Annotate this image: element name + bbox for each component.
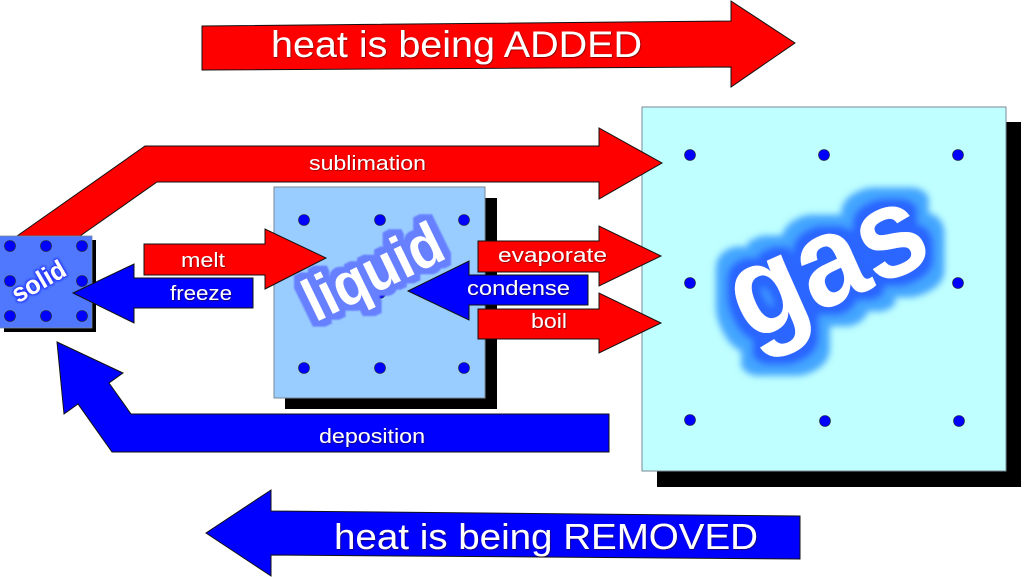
- arrow: sublimation: sublimation: [309, 153, 426, 175]
- arrow: evaporate: [478, 226, 661, 286]
- arrow: boil: [478, 293, 661, 353]
- arrow: condense: condense: [467, 278, 570, 300]
- arrow: deposition: deposition: [319, 426, 425, 448]
- panel: solid box: solid: [6, 254, 71, 309]
- panel: solid box: [0, 236, 96, 332]
- arrow: heat is being added: heat is being ADDED: [271, 24, 642, 65]
- arrow: heat is being removed: [206, 490, 800, 576]
- arrow: boil: boil: [531, 311, 567, 333]
- arrow: melt: [144, 229, 326, 289]
- arrow: melt: melt: [181, 250, 226, 272]
- arrow: freeze: freeze: [170, 283, 232, 305]
- arrow: heat is being added: [202, 1, 795, 87]
- arrow: heat is being removed: heat is being REMOVED: [334, 516, 758, 557]
- panel: liquid box: [274, 187, 497, 409]
- panel: gas box: [642, 107, 1021, 487]
- arrow: deposition: [57, 342, 609, 452]
- arrow: sublimation: [17, 128, 662, 236]
- panel: gas box: gas: [703, 155, 947, 368]
- arrow: condense: [408, 261, 588, 320]
- arrow: evaporate: evaporate: [498, 245, 607, 267]
- arrow: freeze: [73, 264, 253, 323]
- panel: liquid box: liquid: [292, 209, 454, 334]
